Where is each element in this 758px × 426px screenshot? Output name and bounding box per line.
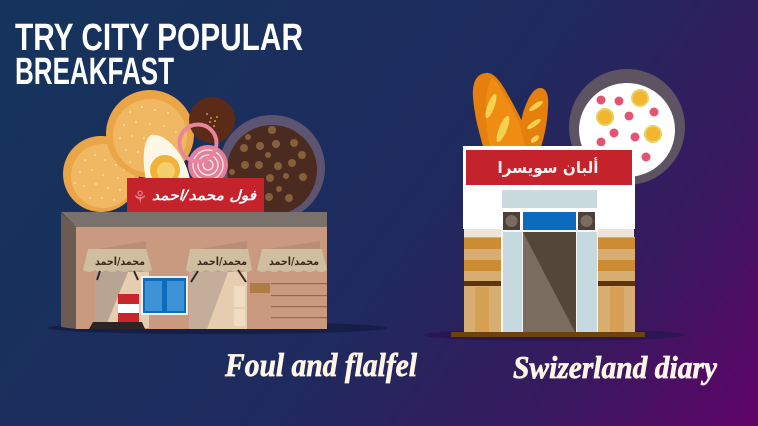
label: Swizerland diary: Swizerland diary [513, 349, 718, 385]
red shop sign [127, 178, 264, 212]
icon: top bread bun [106, 90, 194, 178]
awning 1: محمد/احمد [95, 255, 145, 268]
shop shadow [423, 329, 685, 341]
title: TRY CITY POPULAR [15, 17, 303, 59]
siding lines [271, 283, 327, 318]
first door [95, 272, 149, 328]
awning 2: محمد/احمد [197, 255, 247, 268]
white door surround [501, 229, 598, 332]
building: Switzerland dairy shop [451, 146, 645, 337]
building: foul and falafel shop [61, 212, 327, 329]
left lamp square [503, 212, 520, 230]
awning 3: محمد/احمد [269, 255, 319, 268]
second door [189, 272, 247, 329]
shop side wall [61, 213, 76, 329]
pale panel [502, 190, 597, 208]
label: Foul and flalfel: Foul and flalfel [224, 348, 418, 384]
sausage slices [596, 96, 658, 162]
icon: onion [180, 124, 228, 185]
icon: left bread bun [63, 136, 139, 212]
white facade [463, 146, 635, 229]
awning 1 [83, 241, 152, 272]
shop roof [61, 212, 327, 227]
red and white stand [118, 294, 139, 323]
plate of eggs [569, 69, 685, 185]
cream strip [464, 229, 634, 237]
red sign [466, 150, 632, 185]
tan plaque [250, 283, 270, 293]
red sign: ألبان سويسرا [498, 157, 598, 177]
left shelf [464, 237, 501, 332]
icon: bowl of foul [219, 115, 325, 221]
doormat [89, 322, 145, 329]
door [523, 232, 576, 332]
shop wall [76, 226, 327, 329]
red shop sign: فول محمد/احمد [152, 188, 257, 204]
icon: falafel [189, 97, 235, 143]
shop shadow [47, 322, 387, 334]
blue window [141, 276, 188, 315]
title [15, 17, 303, 93]
awning 2 [186, 241, 252, 272]
left column [503, 232, 522, 332]
food illustration: foul and falafel [63, 90, 325, 221]
base [451, 332, 645, 337]
right lamp square [578, 212, 595, 230]
awning 3 [257, 241, 327, 272]
egg yolks [597, 90, 661, 142]
right column [577, 232, 597, 332]
blue sign [523, 212, 576, 230]
icon: boiled egg [144, 135, 190, 185]
right shelf [598, 237, 635, 332]
title: BREAKFAST [15, 51, 174, 93]
red shop sign: ⚘ [132, 188, 148, 208]
awning brackets [97, 270, 246, 282]
icon: baguettes [473, 73, 548, 150]
